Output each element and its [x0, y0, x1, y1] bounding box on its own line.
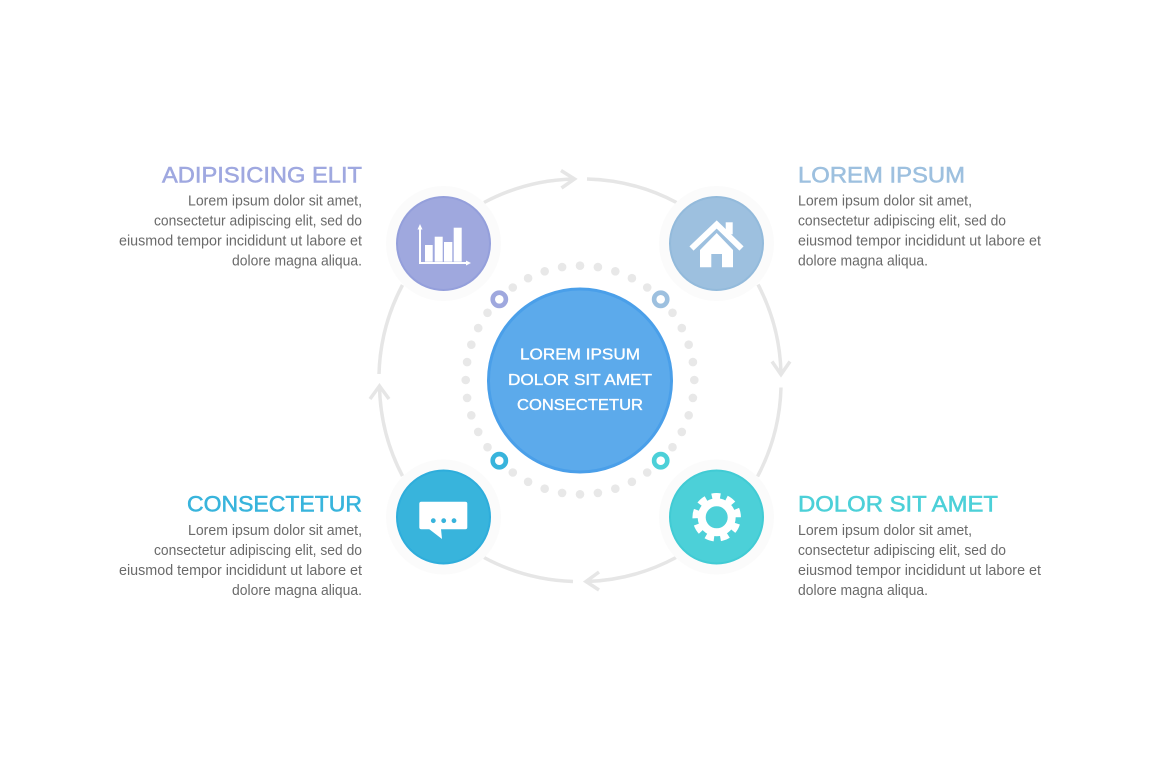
text block: Dolor sit amet: [798, 492, 1041, 599]
icon: bar chart: [386, 186, 501, 301]
ring markers: [493, 293, 667, 467]
dotted ring: [461, 261, 699, 499]
icon: speech bubble: [386, 460, 501, 574]
text block: Adipisicing elit: [119, 162, 362, 270]
center circle: DOLOR SIT AMET: [508, 372, 652, 389]
text block: Consectetur: consectetur adipiscing elit, sed do: [154, 543, 362, 559]
text block: Lorem ipsum: eiusmod tempor incididunt ut labore et: [798, 234, 1041, 250]
text block: Lorem ipsum: [798, 162, 1041, 270]
text block: Dolor sit amet: dolore magna aliqua.: [798, 583, 928, 599]
text block: Adipisicing elit: consectetur adipiscing elit, sed do: [154, 214, 362, 230]
text block: Adipisicing elit: Lorem ipsum dolor sit amet,: [188, 194, 362, 210]
center circle: LOREM IPSUM: [520, 346, 640, 364]
center circle: [488, 289, 672, 472]
arrow: bottom: [586, 558, 676, 590]
cycle arrows ring: [370, 170, 790, 590]
arrow: right side: [758, 284, 790, 374]
text block: Consectetur: dolore magna aliqua.: [232, 583, 362, 599]
center circle: CONSECTETUR: [517, 397, 643, 414]
text block: Dolor sit amet: consectetur adipiscing elit, sed do: [798, 543, 1006, 559]
arrow: top: [484, 170, 574, 202]
text block: Lorem ipsum: Lorem ipsum dolor sit amet,: [798, 194, 972, 210]
icon: gear: [659, 460, 774, 574]
text block: Lorem ipsum: consectetur adipiscing elit, sed do: [798, 214, 1006, 230]
text block: Dolor sit amet: eiusmod tempor incididunt ut labore et: [798, 563, 1041, 579]
text block: Consectetur: [119, 492, 362, 599]
icon: house: [659, 186, 774, 301]
text block: Dolor sit amet: Lorem ipsum dolor sit amet,: [798, 523, 972, 539]
text block: Lorem ipsum: dolore magna aliqua.: [798, 254, 928, 270]
arrow: left side: [370, 386, 402, 476]
text block: Consectetur: CONSECTETUR: [187, 492, 362, 516]
text block: Adipisicing elit: ADIPISICING ELIT: [162, 162, 362, 187]
text block: Consectetur: Lorem ipsum dolor sit amet,: [188, 523, 362, 539]
text block: Lorem ipsum: LOREM IPSUM: [798, 162, 965, 187]
text block: Adipisicing elit: dolore magna aliqua.: [232, 254, 362, 270]
text block: Dolor sit amet: DOLOR SIT AMET: [798, 492, 998, 516]
text block: Adipisicing elit: eiusmod tempor incididunt ut labore et: [119, 234, 362, 250]
text block: Consectetur: eiusmod tempor incididunt ut labore et: [119, 563, 362, 579]
